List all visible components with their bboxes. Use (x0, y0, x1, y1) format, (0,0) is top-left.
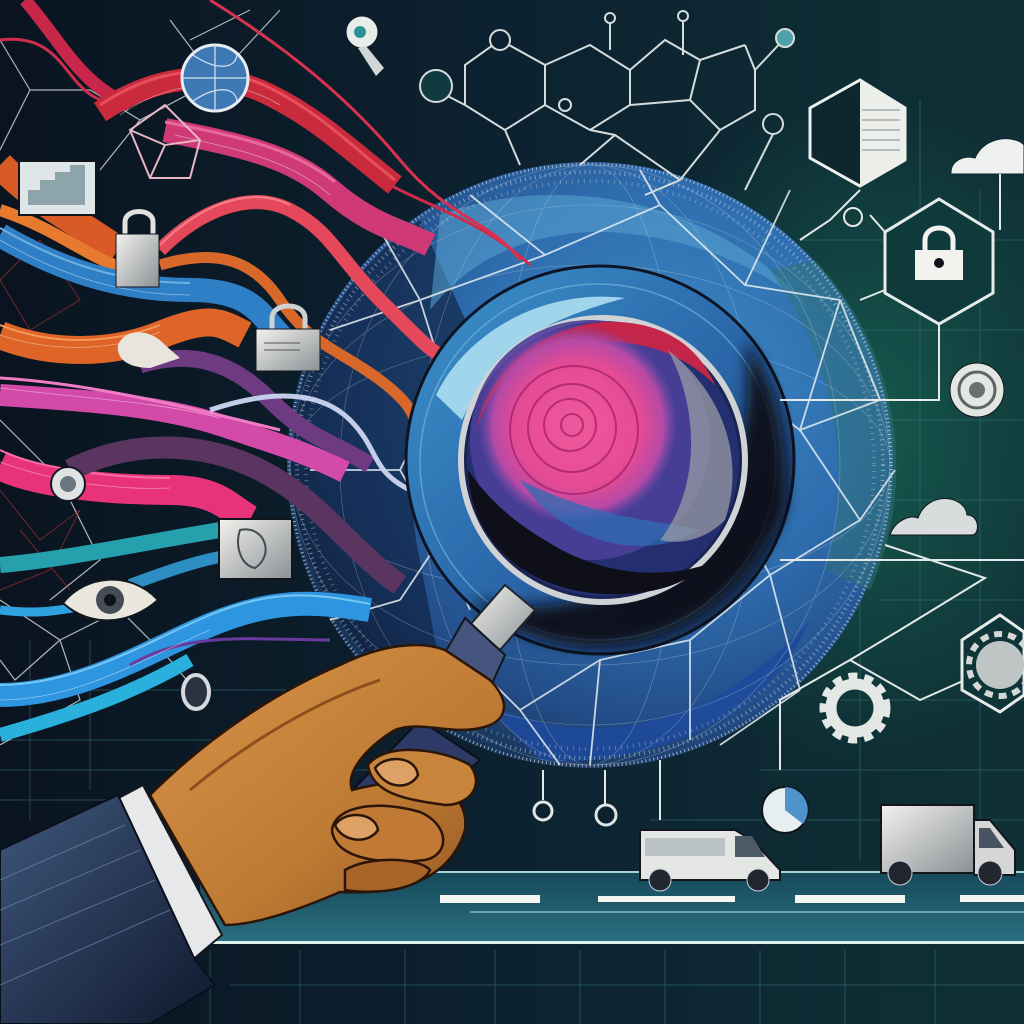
icon: large hexagon half (810, 80, 905, 186)
icon: square badge (219, 519, 292, 579)
ribbon: purple (140, 358, 370, 465)
van left (640, 830, 780, 891)
icon: eye (63, 580, 158, 620)
red mesh left (0, 240, 80, 590)
ribbon: pale arc (210, 396, 410, 490)
fingernails (335, 759, 418, 840)
icon: gear (823, 676, 887, 740)
icon: node eye (51, 467, 85, 501)
hand (150, 645, 504, 925)
lens red top (476, 322, 715, 430)
lens grey crescent (660, 350, 733, 542)
lens rim (461, 318, 745, 602)
jacket sleeve (0, 795, 215, 1024)
van right (881, 805, 1015, 885)
ribbon: bright blue (0, 605, 90, 612)
network lines: left (0, 10, 280, 745)
connector lines right (543, 174, 1024, 820)
icon: cloud top right (951, 139, 1024, 174)
molecule network (420, 11, 794, 195)
icon: padlock hexagon (885, 199, 993, 324)
dark shadow crescent (470, 340, 786, 646)
lens glass disc (467, 324, 739, 596)
icon: pie chart (762, 787, 808, 833)
lens pink core (478, 325, 678, 525)
icon: padlock card (256, 306, 320, 371)
ribbon: coral (160, 197, 440, 355)
icon: globe (182, 45, 248, 111)
blue ring around lens (406, 266, 794, 654)
lens glare left (436, 297, 625, 420)
ribbon fibres (0, 85, 330, 700)
icon: capsule (118, 332, 180, 368)
lens spiral rings (510, 366, 638, 494)
ribbon: orange middle (160, 257, 420, 425)
ribbon: dark plum (70, 448, 400, 585)
icon: wireframe cube (130, 105, 200, 178)
ribbons: data streams (0, 0, 530, 735)
lens black lower band (468, 470, 705, 594)
ribbon: crimson top (0, 0, 530, 265)
sphere (287, 162, 896, 768)
ribbon: orange upper (0, 165, 118, 250)
ribbon: teal (0, 530, 220, 565)
icon: gear hexagon (962, 615, 1024, 712)
finger: middle (332, 806, 443, 862)
icon: cloud mid right (890, 498, 977, 535)
ribbon: blue (0, 228, 290, 345)
road (200, 871, 1024, 944)
sphere mesh (310, 170, 895, 765)
ribbon: orange lower (0, 322, 245, 350)
icon: target (950, 363, 1004, 417)
ribbon: hot pink (0, 450, 250, 520)
finger: index (368, 750, 476, 805)
sphere stippled edge (289, 164, 891, 766)
icon: small nodes (534, 802, 616, 825)
magnifier lens assembly (406, 266, 794, 654)
lens blue lower band (520, 480, 700, 546)
ribbon: magenta (0, 378, 345, 472)
icon: chart card (19, 161, 96, 215)
icon: key top (346, 16, 384, 76)
shirt cuff (115, 785, 222, 962)
icon: padlock silver (116, 212, 159, 287)
magnifier handle (295, 585, 535, 885)
finger: ring (345, 860, 430, 892)
ribbon: pink upper (165, 122, 430, 245)
icon: small ring (183, 675, 209, 709)
